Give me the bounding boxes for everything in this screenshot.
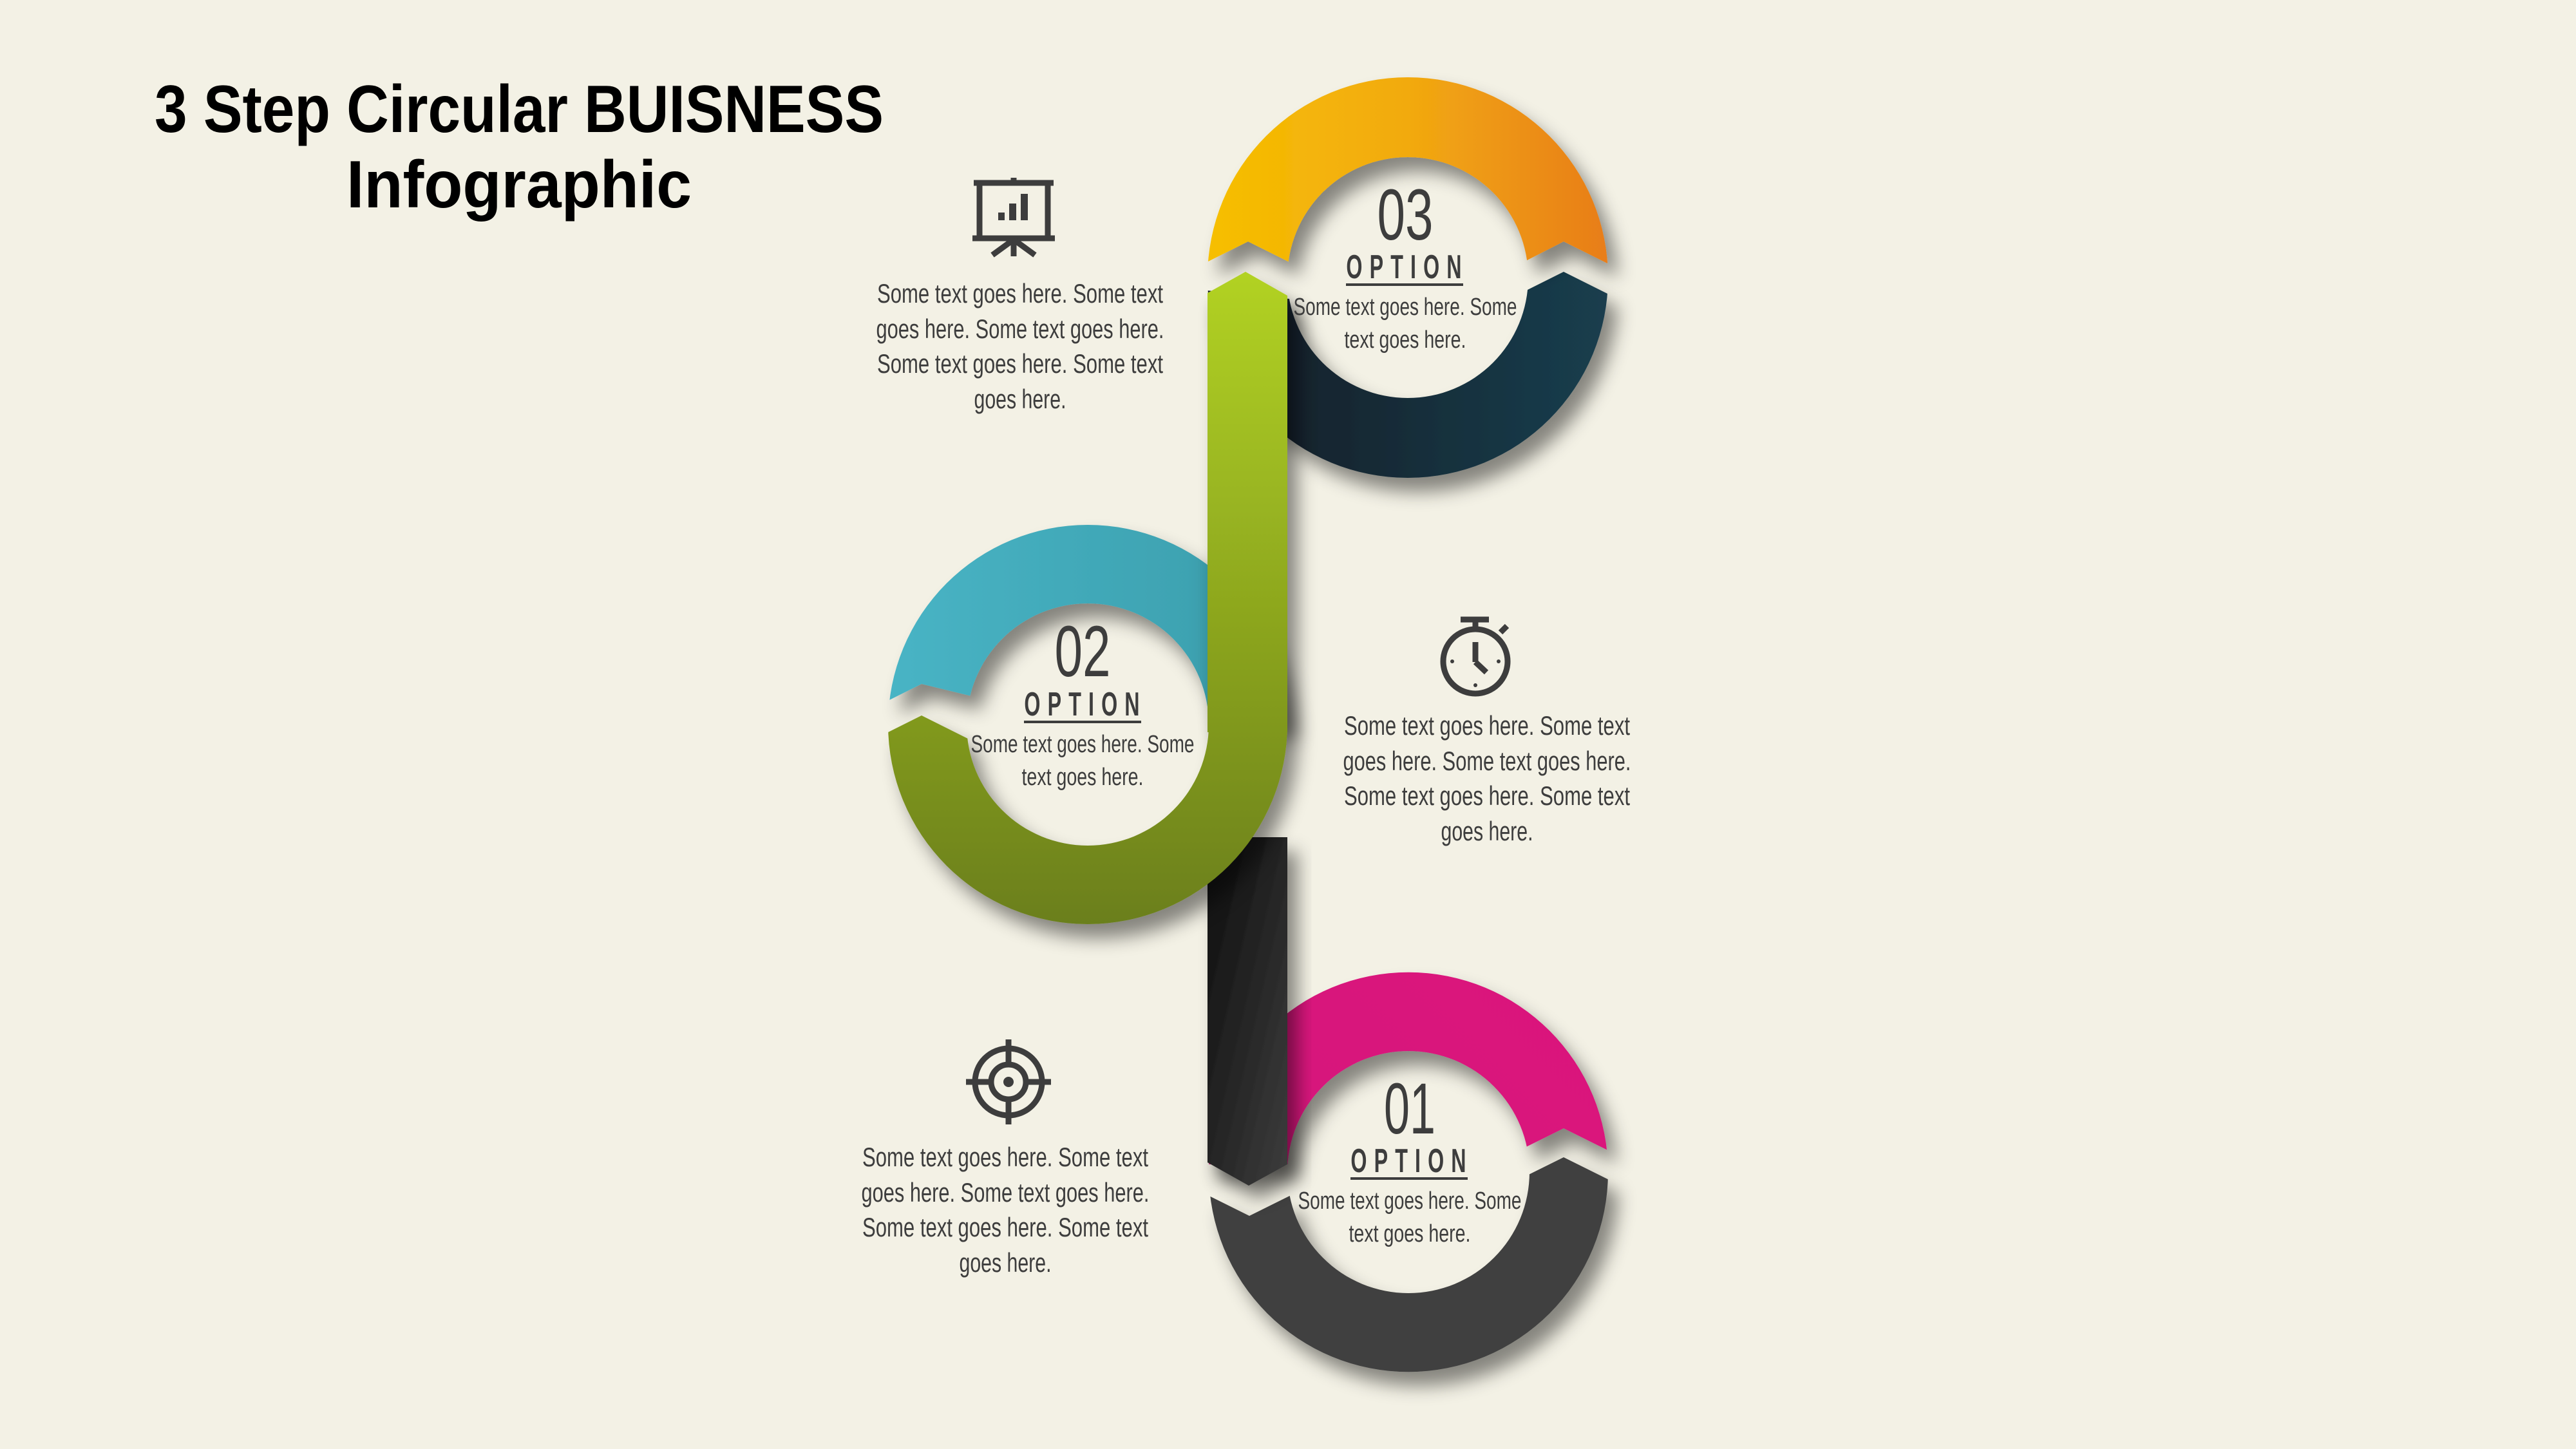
icon: presentation board — [972, 178, 1055, 256]
option 02 text: Some text goes here. Some — [971, 731, 1194, 758]
title: Infographic — [346, 147, 692, 222]
text block top left — [876, 278, 1164, 414]
ring 2 teal segment — [889, 525, 1309, 748]
ring 3 orange segment — [1208, 77, 1628, 285]
option 03 text — [1293, 175, 1517, 354]
ring 1 pink segment — [1208, 972, 1627, 1190]
option 01 text: 01 — [1384, 1068, 1435, 1149]
option 01 text: Some text goes here. Some — [1298, 1188, 1521, 1215]
text block bottom left: goes here. Some text goes here. — [862, 1177, 1149, 1208]
option 02 text: text goes here. — [1021, 764, 1144, 791]
text block middle right — [1343, 710, 1631, 846]
text block top left: Some text goes here. Some text — [877, 348, 1163, 379]
option 02 text — [971, 611, 1194, 791]
option 01 text — [1298, 1068, 1521, 1247]
text block top left: goes here. — [974, 384, 1066, 414]
option 03 text: text goes here. — [1345, 327, 1466, 354]
text block bottom left: Some text goes here. Some text — [862, 1142, 1148, 1172]
text block middle right: Some text goes here. Some text — [1344, 710, 1630, 741]
black connector bar — [1208, 837, 1287, 1186]
option 03 text: Some text goes here. Some — [1293, 294, 1517, 321]
option 02 text: OPTION — [1024, 686, 1140, 723]
text block bottom left: Some text goes here. Some text — [862, 1212, 1148, 1242]
text block top left: goes here. Some text goes here. — [876, 314, 1164, 344]
option 01 text: OPTION — [1350, 1142, 1466, 1180]
text block middle right: Some text goes here. Some text — [1344, 781, 1630, 811]
text block middle right: goes here. Some text goes here. — [1343, 746, 1631, 776]
option 01 text: text goes here. — [1349, 1220, 1471, 1247]
text block bottom left: goes here. — [960, 1247, 1051, 1278]
icon: stopwatch — [1443, 620, 1508, 694]
option 03 text: 03 — [1377, 175, 1434, 255]
option 03 text: OPTION — [1346, 249, 1462, 286]
text block bottom left — [862, 1142, 1149, 1278]
green J connector — [888, 272, 1287, 924]
text block top left: Some text goes here. Some text — [877, 278, 1163, 308]
title — [155, 72, 884, 222]
icon: target — [966, 1039, 1051, 1124]
option 02 text: 02 — [1055, 611, 1110, 692]
text block middle right: goes here. — [1441, 816, 1533, 846]
title: 3 Step Circular BUISNESS — [155, 72, 884, 147]
ring 3 navy segment — [1208, 272, 1629, 505]
ring 1 dark segment — [1210, 1157, 1629, 1399]
